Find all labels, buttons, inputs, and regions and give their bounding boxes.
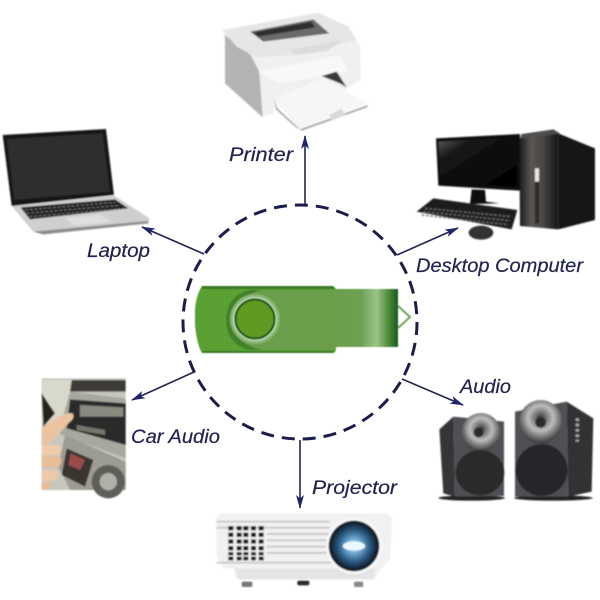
arrow: to laptop — [142, 227, 204, 254]
label: Audio: Audio — [459, 377, 511, 398]
arrow: to desktop computer — [397, 228, 458, 255]
label: Projector: Projector — [312, 478, 398, 499]
label: Desktop Computer: Desktop Computer — [416, 256, 584, 277]
icon: printer — [223, 13, 368, 131]
arrow: to audio — [402, 379, 463, 405]
label: Car Audio: Car Audio — [131, 427, 220, 448]
dashed circle — [183, 205, 417, 439]
arrow: to car audio — [132, 372, 194, 400]
arrow: to printer — [304, 136, 306, 205]
label: Printer: Printer — [229, 145, 294, 166]
icon: car audio — [42, 378, 126, 498]
label: Laptop: Laptop — [87, 241, 150, 262]
arrow: to projector — [299, 440, 301, 508]
icon: laptop — [3, 129, 149, 234]
icon: green USB drive — [195, 286, 410, 353]
icon: speakers — [438, 400, 593, 501]
icon: desktop computer — [417, 129, 595, 240]
icon: projector — [216, 513, 392, 587]
